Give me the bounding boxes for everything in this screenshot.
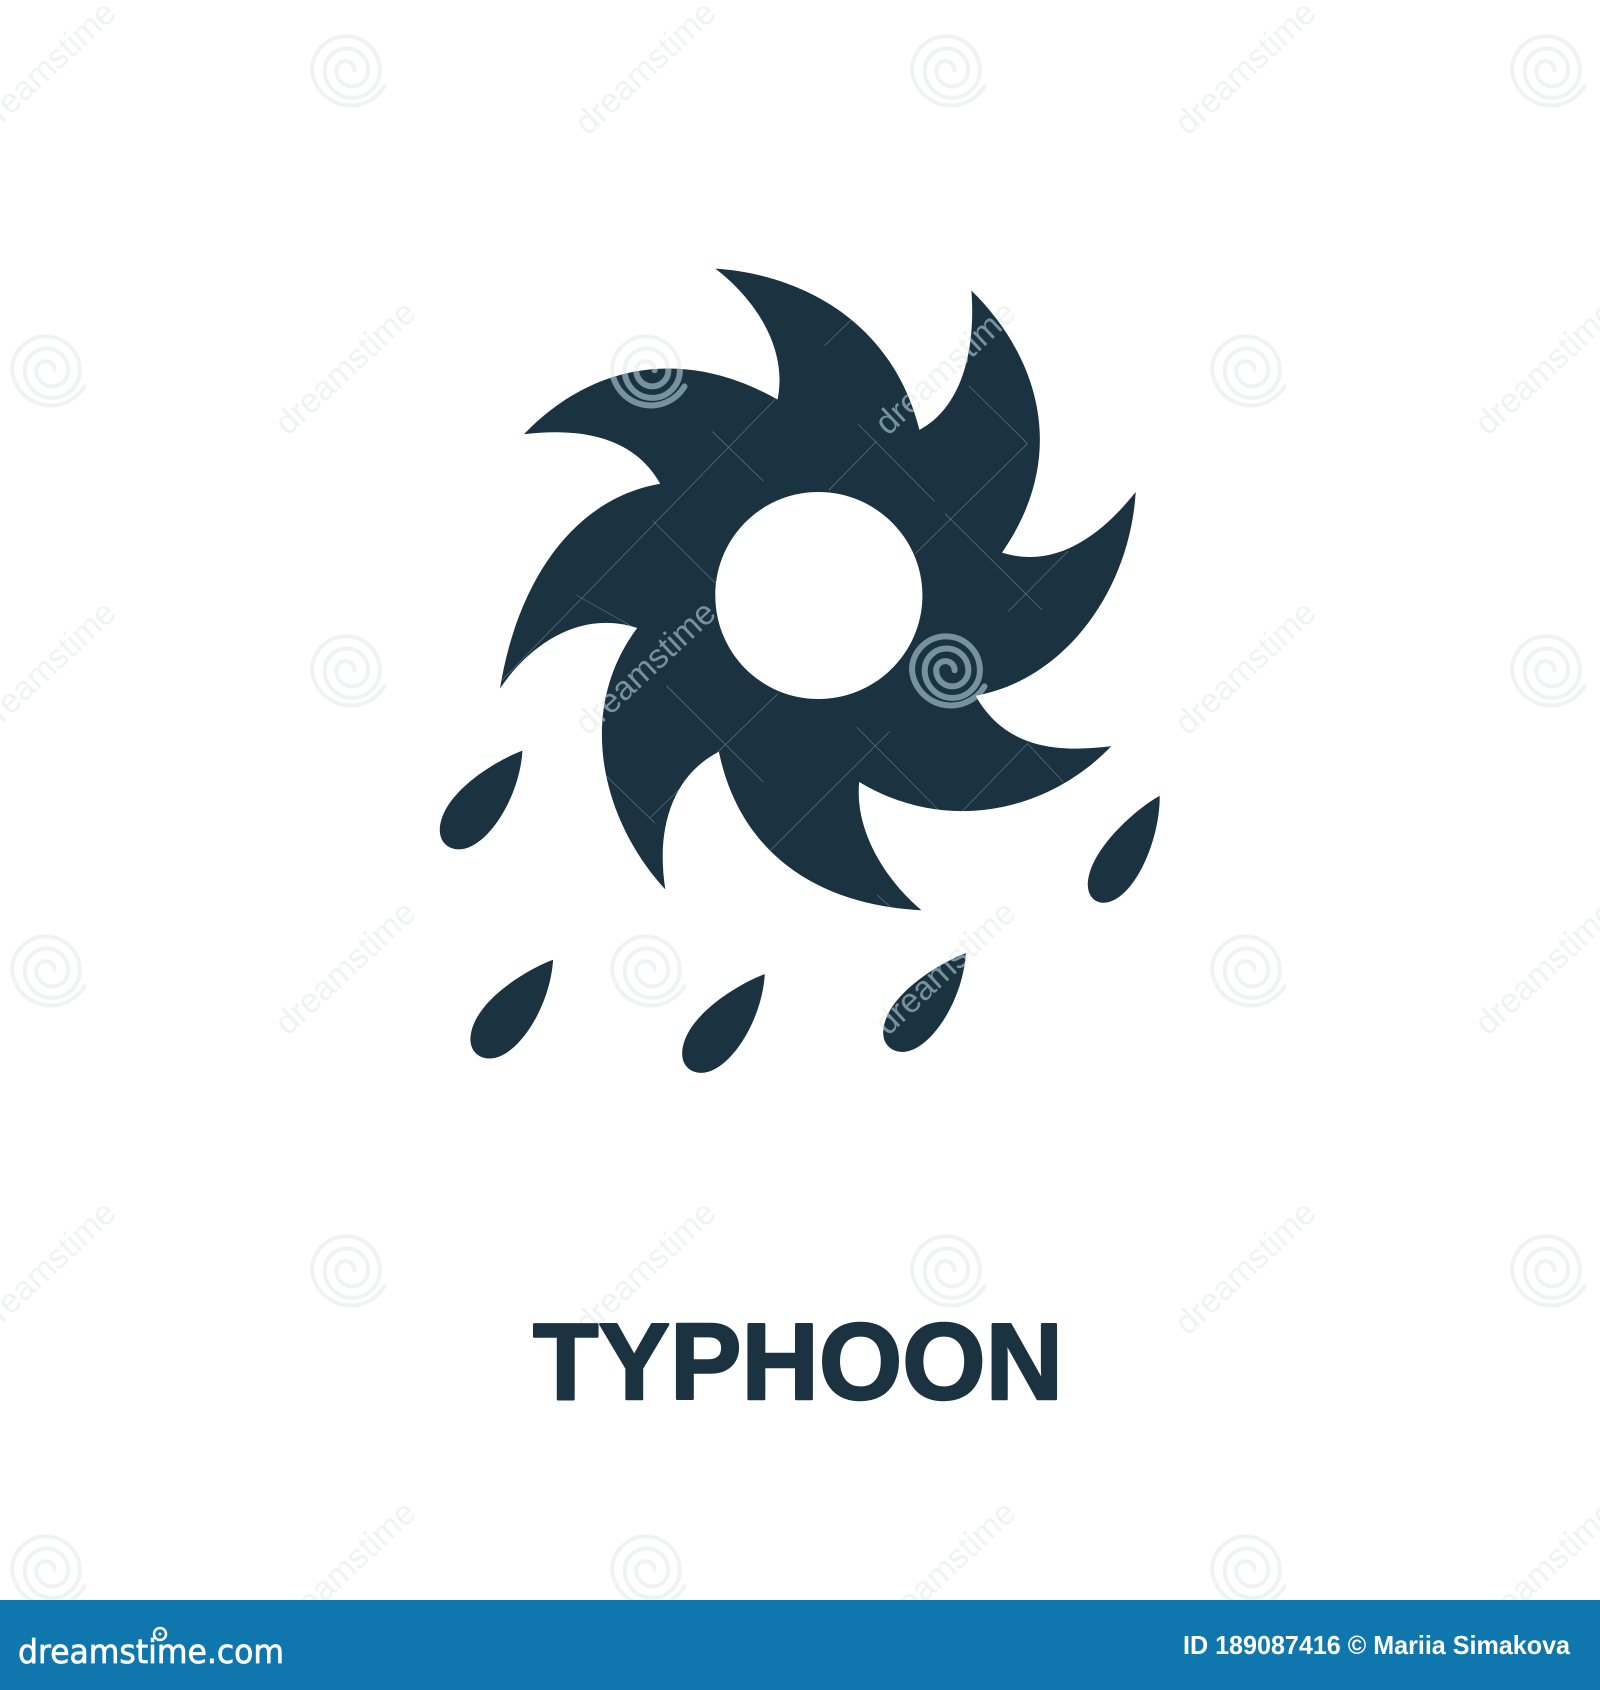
faint background watermarks: dreamstime (268, 293, 423, 442)
faint background watermarks: dreamstime (268, 1493, 423, 1642)
icon: typhoon swirl with rain drops (440, 269, 1160, 1073)
faint background watermarks: dreamstime (568, 593, 723, 742)
faint background watermarks: dreamstime (1168, 1193, 1323, 1342)
title: TYPHOON (533, 1301, 1063, 1423)
footer logo: dreamstime.com (18, 1632, 284, 1671)
faint background watermarks: dreamstime (568, 1193, 723, 1342)
faint background watermarks: dreamstime (268, 893, 423, 1042)
icon: rain drops (440, 751, 1160, 1073)
icon: eight-blade swirl (500, 269, 1136, 910)
watermark overlay on icon: dreamstime (868, 293, 1023, 442)
footer credit: ID 189087416 © Mariia Simakova (1183, 1630, 1571, 1660)
faint background watermarks: dreamstime (868, 293, 1023, 442)
watermark overlay on icon (502, 293, 1068, 1042)
faint background watermarks: dreamstime (1168, 593, 1323, 742)
watermark overlay on icon: dreamstime (568, 593, 723, 742)
footer bar (0, 1600, 1600, 1690)
faint background watermarks: dreamstime (868, 893, 1023, 1042)
faint background watermarks: dreamstime (868, 1493, 1023, 1642)
watermark overlay on icon: dreamstime (868, 893, 1023, 1042)
